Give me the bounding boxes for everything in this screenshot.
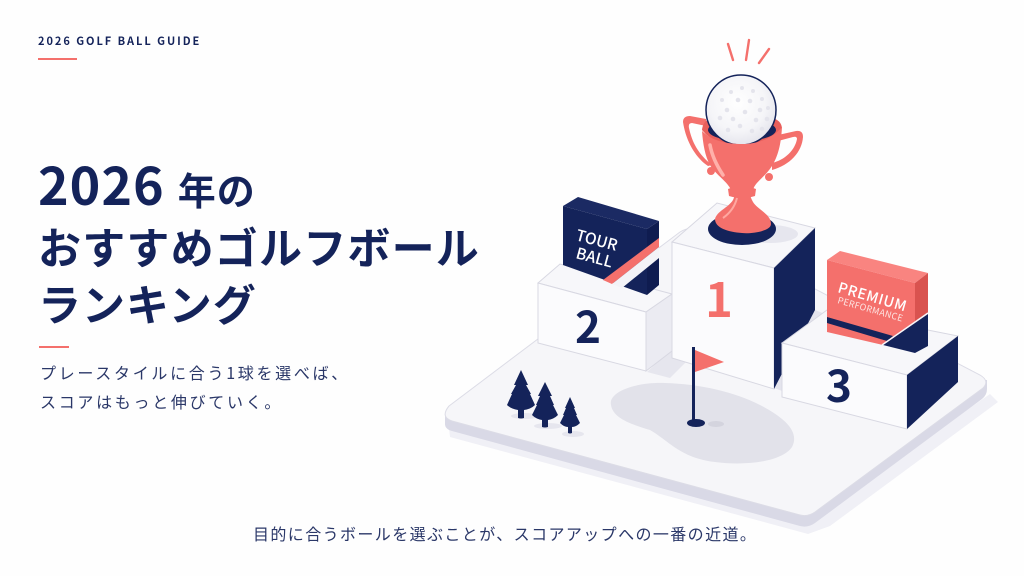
flag [687, 347, 724, 427]
title line 3: ランキング [38, 272, 257, 334]
number 1: 1 [705, 262, 733, 331]
bottom caption: 目的に合うボールを選ぶことが、スコアアップへの一番の近道。 [253, 521, 757, 545]
putting green [611, 383, 794, 463]
title line 1: 2026 年の [38, 145, 256, 220]
box text: PREMIUM [836, 277, 910, 316]
podium 3 [782, 310, 958, 429]
box: premium performance: PERFORMANCE [836, 293, 905, 325]
eyebrow accent rule [38, 58, 77, 60]
golf ball [706, 75, 776, 145]
subtitle: スコアはもっと伸びていく。 [40, 389, 283, 413]
podium 2 [538, 264, 690, 378]
number 3: 3 [826, 351, 852, 415]
eyebrow label: 2026 GOLF BALL GUIDE [38, 33, 201, 49]
box text: TOUR [574, 224, 620, 256]
trophy base [708, 213, 776, 245]
tree 3 [560, 397, 580, 434]
box: tour ball: BALL [574, 242, 616, 273]
trophy shadow [742, 225, 798, 243]
trophy with golf ball [683, 40, 803, 245]
cup [702, 127, 782, 190]
subtitle accent rule [39, 346, 69, 348]
tree 2 [532, 382, 558, 428]
number 2: 2 [575, 292, 601, 356]
cup inner [702, 118, 782, 146]
base platform [445, 228, 998, 534]
tree 1 [507, 370, 535, 418]
trophy foot [715, 188, 771, 233]
title line 2: おすすめゴルフボール [38, 215, 480, 277]
trees [507, 370, 584, 437]
box: tour ball [563, 197, 659, 295]
box: premium performance [827, 251, 928, 353]
subtitle: プレースタイルに合う1球を選べば、 [40, 360, 350, 384]
handles [683, 116, 712, 166]
podium 1 [672, 203, 830, 392]
subtitle [40, 360, 350, 413]
rays [728, 40, 769, 63]
